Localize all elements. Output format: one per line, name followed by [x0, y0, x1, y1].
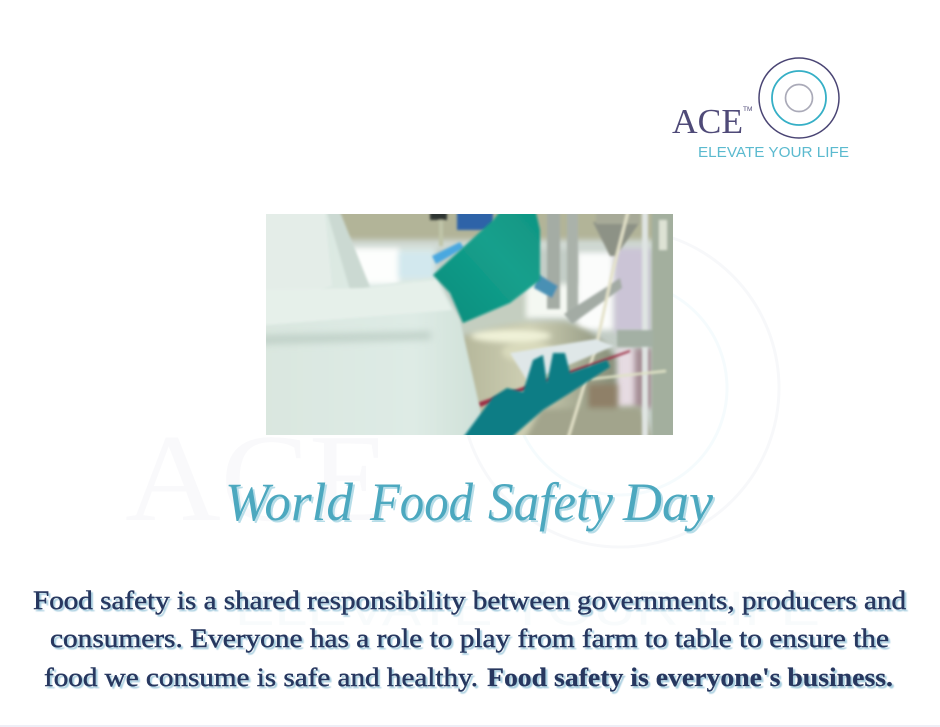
paragraph shadow — [35, 587, 908, 694]
clipboard — [477, 339, 630, 407]
logo wordmark: ACE — [672, 102, 743, 141]
white lab coat — [266, 214, 482, 435]
title shadow: Day — [624, 474, 715, 534]
steel tank — [464, 318, 652, 435]
title text: Day — [622, 472, 713, 532]
title text: Safety — [488, 472, 613, 532]
paragraph shadow: Food safety is everyone's business. — [489, 664, 895, 694]
paragraph text: Food safety is a shared responsibility between governments, producers and — [33, 585, 906, 615]
title shadow: Safety — [490, 474, 615, 534]
paragraph shadow: food we consume is safe and healthy. — [46, 664, 480, 694]
logo: ACE Elevate Your Life — [672, 57, 849, 161]
steel pipes and fittings — [428, 214, 673, 435]
paragraph shadow: consumers. Everyone has a role to play from farm to table to ensure the — [52, 625, 891, 655]
icon: concentric rings — [759, 58, 839, 138]
paragraph text — [33, 585, 906, 692]
title shadow: World — [227, 474, 356, 534]
upper green glove — [433, 204, 540, 323]
title text: World — [225, 472, 354, 532]
title text: Food — [369, 472, 474, 532]
paragraph shadow: Food safety is a shared responsibility between governments, producers and — [35, 587, 908, 617]
logo tagline: ELEVATE YOUR LIFE — [698, 145, 849, 161]
paragraph text: Food safety is everyone's business. — [487, 662, 893, 692]
body paragraph — [33, 585, 908, 694]
background wall and windows — [340, 214, 653, 410]
trademark mark: TM — [743, 106, 752, 113]
photo: gloved lab worker holding clipboard — [266, 214, 673, 435]
title shadow — [227, 474, 715, 534]
paragraph text: food we consume is safe and healthy. — [44, 662, 478, 692]
title shadow: Food — [371, 474, 476, 534]
title text — [225, 472, 713, 532]
background watermark: faint ACE logo: ACE — [125, 410, 390, 548]
background watermark: faint ACE logo: ELEVATE YOUR LIFE — [235, 583, 820, 636]
title — [225, 472, 715, 534]
paragraph text: consumers. Everyone has a role to play from farm to table to ensure the — [50, 623, 889, 653]
lower teal glove — [462, 351, 612, 435]
